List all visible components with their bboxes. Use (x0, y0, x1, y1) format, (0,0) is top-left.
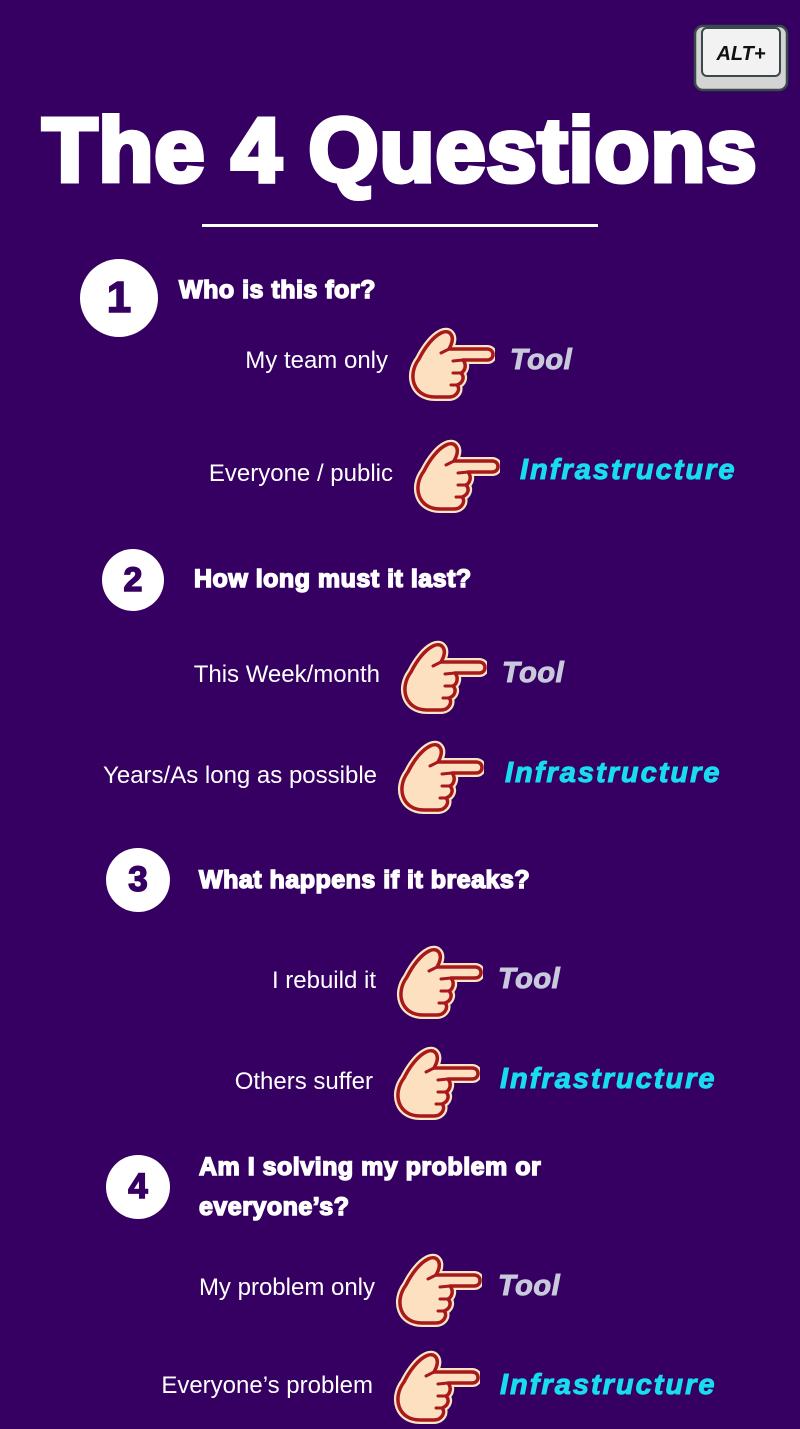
row: years: Infrastructure (505, 757, 722, 789)
icon: ALT+ key: ALT+ (715, 43, 766, 65)
row: I rebuild it: Tool (498, 963, 560, 995)
icon: ALT+ key (694, 24, 788, 92)
number 4 (106, 1155, 170, 1219)
question 3: What happens if it breaks? (199, 866, 530, 894)
question 4: everyone’s? (199, 1193, 349, 1221)
question 2: How long must it last? (194, 565, 472, 593)
question 4 (198, 1153, 542, 1221)
section 4 (106, 1153, 717, 1424)
number 3 (106, 848, 170, 912)
row: my problem only (199, 1254, 561, 1327)
section 2 (102, 549, 722, 814)
row: my problem only: My problem only (199, 1274, 375, 1301)
row: years: Years/As long as possible (103, 762, 377, 789)
number 1: 1 (107, 273, 131, 322)
row: this week/month (194, 640, 565, 714)
number 3: 3 (128, 860, 148, 899)
question 1: Who is this for? (179, 276, 376, 304)
row: everyone's problem: Infrastructure (500, 1369, 717, 1401)
row: everyone's problem (161, 1350, 717, 1424)
row: my team only: Tool (510, 344, 572, 376)
number 2: 2 (124, 560, 142, 598)
row: I rebuild it: I rebuild it (272, 967, 376, 994)
section 3 (106, 848, 717, 1120)
row: others suffer: Infrastructure (500, 1063, 717, 1095)
row: my team only: My team only (245, 347, 388, 374)
row: others suffer (235, 1046, 717, 1120)
row: my problem only: Tool (498, 1270, 560, 1302)
row: my team only (245, 328, 573, 401)
row: this week/month: This Week/month (194, 661, 380, 688)
question 4: Am I solving my problem or (199, 1153, 541, 1181)
row: everyone / public (209, 440, 737, 513)
number 2 (102, 549, 164, 611)
row: I rebuild it (272, 946, 561, 1019)
row: everyone / public: Everyone / public (209, 460, 393, 487)
section 1 (80, 259, 737, 513)
row: everyone's problem: Everyone’s problem (161, 1372, 373, 1399)
number 4: 4 (128, 1167, 148, 1206)
row: everyone / public: Infrastructure (520, 454, 737, 486)
title: The 4 Questions (42, 101, 758, 201)
row: others suffer: Others suffer (235, 1068, 373, 1095)
number 1 (80, 259, 158, 337)
row: years (103, 740, 722, 814)
row: this week/month: Tool (502, 657, 564, 689)
